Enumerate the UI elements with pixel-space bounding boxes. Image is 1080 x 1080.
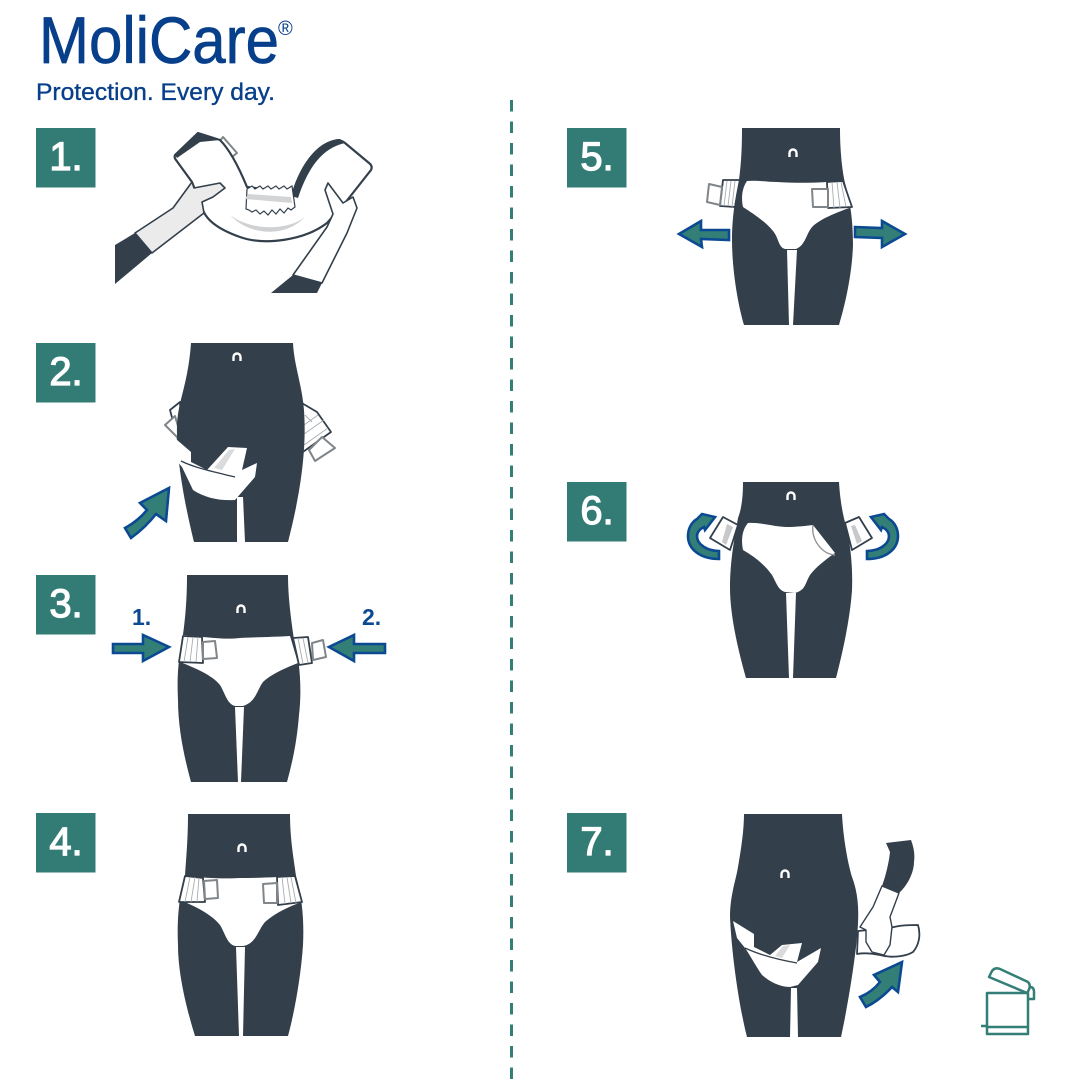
brief	[175, 133, 372, 241]
step 7 badge: 7.	[580, 820, 614, 864]
left sleeve	[115, 233, 152, 284]
right tab	[812, 189, 828, 207]
right tab	[312, 640, 326, 660]
step 2 badge	[36, 343, 96, 402]
left tab	[707, 184, 722, 205]
navel	[782, 870, 788, 878]
right side panel	[277, 876, 302, 905]
step 3 illustration: fastening tabs	[113, 575, 385, 782]
rolled used brief	[857, 925, 919, 957]
right side panel	[827, 181, 852, 208]
left tab	[204, 880, 218, 899]
bin lid	[989, 968, 1030, 993]
tagline: Protection. Every day.	[36, 79, 275, 106]
brief inner	[775, 945, 790, 958]
step 6 illustration: folding tabs back	[688, 482, 898, 678]
brief	[742, 523, 835, 593]
brief front	[169, 433, 257, 500]
icon: waste bin	[981, 968, 1034, 1034]
step 4 badge	[36, 813, 96, 872]
brief	[180, 635, 298, 706]
right hand	[293, 183, 357, 283]
body	[177, 343, 305, 542]
order label 1: 1.	[132, 604, 151, 630]
registered mark: ®	[278, 18, 293, 40]
left hand	[135, 182, 225, 253]
brief dark edges	[175, 133, 220, 158]
right back panel	[300, 402, 331, 454]
step 2 badge: 2.	[49, 350, 83, 394]
hand	[860, 886, 899, 955]
sleeve	[882, 840, 914, 893]
step 5 illustration: pulling tabs outward	[679, 128, 905, 325]
left side panel	[179, 636, 203, 663]
left back panel	[170, 402, 182, 440]
step 6 badge	[567, 482, 626, 542]
brief	[742, 181, 852, 249]
step 3 badge: 3.	[49, 582, 83, 626]
top tab	[219, 137, 237, 157]
step 7 illustration: removing the brief	[730, 814, 919, 1037]
step 5 badge: 5.	[580, 135, 614, 179]
logo	[36, 3, 293, 106]
navel	[238, 606, 244, 613]
step 1 badge	[36, 128, 96, 188]
bin hinge	[1028, 987, 1034, 999]
arrow 2	[329, 635, 385, 661]
right tab	[263, 883, 277, 903]
step 3 badge	[36, 575, 96, 634]
inner gray crescent	[230, 215, 305, 232]
right curved arrow	[867, 514, 898, 559]
left tab	[203, 641, 217, 659]
logo wordmark: MoliCare	[39, 3, 279, 77]
right side panel	[293, 637, 312, 665]
step 5 badge	[567, 128, 626, 188]
brief	[185, 876, 302, 946]
brief inner	[214, 449, 235, 470]
left arrow	[679, 221, 729, 247]
step 2 illustration: placing the brief between the legs	[125, 343, 335, 542]
arrow	[860, 962, 902, 1007]
navel	[790, 150, 796, 157]
body	[732, 128, 853, 325]
step 6 badge: 6.	[580, 489, 614, 533]
navel	[234, 354, 240, 361]
step 4 badge: 4.	[49, 820, 83, 864]
arrow 1	[113, 635, 169, 661]
right tab	[845, 517, 872, 550]
fold	[813, 525, 835, 555]
body	[730, 482, 852, 678]
navel	[788, 493, 794, 500]
step 1 illustration: hands opening the brief	[115, 133, 372, 293]
bin body	[981, 993, 1028, 1034]
right arrow	[855, 221, 905, 247]
order label 2: 2.	[362, 604, 381, 630]
body	[730, 814, 858, 1037]
elastic waist frill	[246, 186, 295, 215]
body	[178, 814, 303, 1036]
step 4 illustration: brief fastened	[178, 814, 303, 1036]
step 1 badge: 1.	[49, 135, 83, 179]
body	[178, 575, 300, 782]
left curved arrow	[688, 514, 719, 559]
left tab	[710, 517, 738, 550]
left side panel	[720, 180, 740, 207]
arrow	[125, 488, 169, 538]
right sleeve	[271, 275, 322, 293]
right back tab	[309, 437, 335, 461]
dashed divider	[510, 100, 513, 1080]
left side panel	[179, 876, 205, 902]
step 7 badge	[567, 813, 626, 872]
navel	[238, 844, 246, 852]
brief front	[733, 921, 821, 987]
